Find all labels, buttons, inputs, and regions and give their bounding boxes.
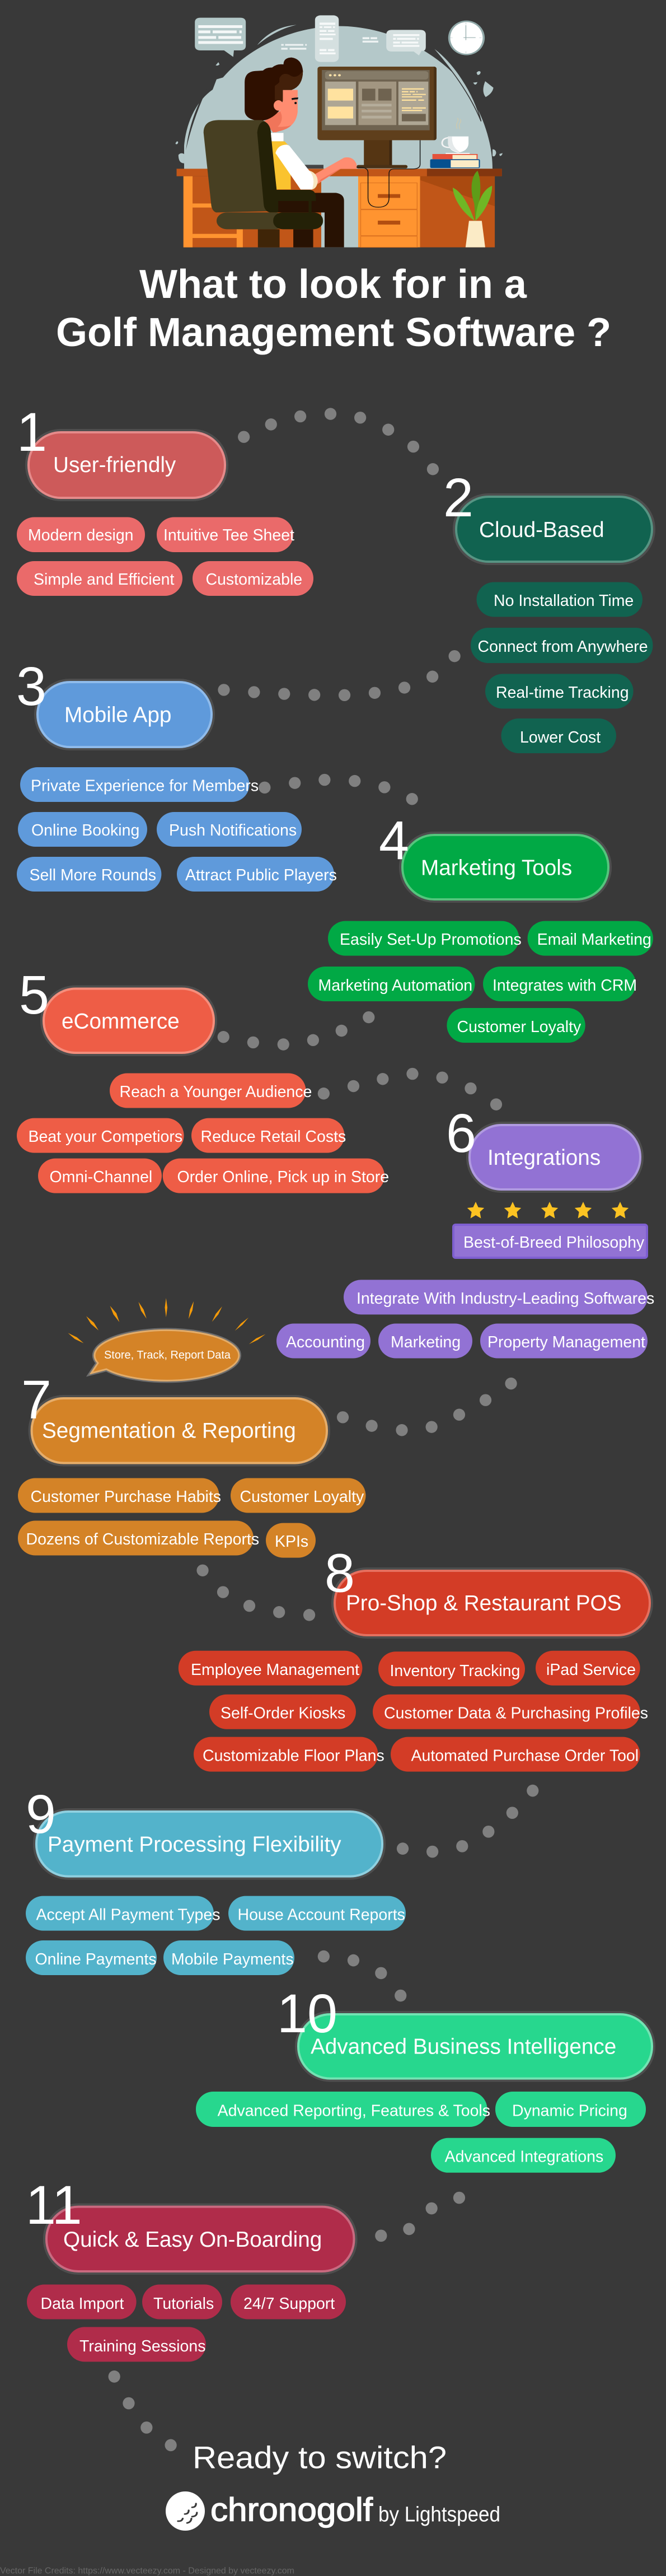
monitor cable [357,140,420,207]
dotted connector: 8 to 9 [397,1785,538,1858]
pill: Real-time Tracking [485,674,634,708]
heading pill: Pro-Shop & Restaurant POS [331,1567,653,1639]
pill: Customer Data & Purchasing Profiles [373,1695,648,1729]
section 9: Payment Processing Flexibility [26,1784,406,1975]
pill: Lower Cost: Lower Cost [520,729,601,746]
pill: Order Online, Pick up in Store: Order Online, Pick up in Store [177,1168,389,1186]
pill: Attract Public Players [177,857,337,892]
pill: Inventory Tracking: Inventory Tracking [390,1662,520,1680]
pill: Connect from Anywhere [471,628,653,663]
pill: 24/7 Support [231,2285,346,2320]
potted plant [453,171,492,248]
five gold stars [467,1202,629,1219]
clock [448,21,485,55]
section 6: Integrations [276,1103,654,1359]
pill: iPad Service: iPad Service [546,1661,636,1679]
speech bubble tall [315,15,339,62]
pill: Self-Order Kiosks: Self-Order Kiosks [221,1705,345,1723]
pill: Customer Loyalty: Customer Loyalty [240,1488,364,1506]
wordmark: by Lightspeed: by Lightspeed [378,2503,500,2527]
pill: 24/7 Support: 24/7 Support [243,2295,335,2313]
pill: Employee Management [179,1651,362,1686]
wordmark: chronogolf: chronogolf [210,2492,373,2528]
pill: Accounting: Accounting [286,1333,365,1351]
pill: Accept All Payment Types [26,1896,220,1931]
pill: Customizable [193,561,313,596]
number 7: 7 [21,1369,51,1430]
pill: Online Payments [26,1940,157,1975]
heading pill: Cloud-Based: Cloud-Based [479,518,604,542]
pill: Customer Loyalty [447,1008,585,1043]
pill: Marketing Automation [308,967,475,1001]
heading pill: Integrations: Integrations [487,1146,601,1170]
heading pill: Payment Processing Flexibility: Payment Processing Flexibility [48,1832,341,1857]
pill: Omni-Channel: Omni-Channel [49,1168,152,1186]
pill: Data Import: Data Import [40,2295,124,2313]
section 4: Marketing Tools [308,810,653,1043]
office chair [204,120,323,229]
desk [177,169,502,248]
computer monitor [317,67,437,169]
pill: Attract Public Players: Attract Public Players [185,866,337,884]
heading pill: eCommerce: eCommerce [62,1009,180,1033]
heading pill: Mobile App: Mobile App [64,703,171,727]
heading pill: Marketing Tools [399,832,612,903]
pill: Automated Purchase Order Tool: Automated Purchase Order Tool [411,1747,639,1765]
heading pill: User-friendly [25,429,228,501]
call to action: Ready to switch?: Ready to switch? [193,2439,447,2475]
heading pill: Segmentation & Reporting: Segmentation & Reporting [42,1419,296,1443]
dotted connector: 5 to 6 [318,1068,502,1110]
pill: Customizable: Customizable [206,571,302,589]
pill: Intuitive Tee Sheet: Intuitive Tee Sheet [163,526,294,544]
under-desk wall [321,176,358,248]
number 5: 5 [19,964,49,1025]
pill: Dynamic Pricing: Dynamic Pricing [512,2102,627,2120]
pill: Online Payments: Online Payments [35,1950,157,1968]
heading pill: Integrations [466,1122,644,1193]
number 10: 10 [277,1983,337,2044]
pill: Sell More Rounds [17,857,161,892]
section 10: Advanced Business Intelligence [196,1983,655,2173]
pill: Customer Loyalty [231,1478,366,1513]
pill: Advanced Reporting, Features & Tools: Advanced Reporting, Features & Tools [218,2102,490,2120]
pill: Reach a Younger Audience [110,1073,312,1108]
pill: Mobile Payments: Mobile Payments [171,1950,294,1968]
rays around speech bubble [68,1298,265,1344]
pill: Dozens of Customizable Reports [18,1521,259,1556]
heading pill: Mobile App [34,679,215,750]
heading pill: Advanced Business Intelligence: Advanced Business Intelligence [311,2035,616,2059]
pill: Push Notifications: Push Notifications [169,822,297,839]
heading pill: eCommerce [40,986,217,1056]
number 8: 8 [325,1543,355,1604]
section 3: Mobile App [16,656,337,892]
pill: Accept All Payment Types: Accept All Payment Types [36,1906,220,1924]
speech bubble: Store, Track, Report Data: Store, Track, Report Data [104,1349,231,1361]
section 1: User-friendly [17,402,313,596]
logo: chronogolf by Lightspeed [166,2491,500,2531]
heading pill: Quick & Easy On-Boarding: Quick & Easy On-Boarding [63,2228,322,2252]
pill: KPIs: KPIs [275,1533,308,1551]
pill: Property Management: Property Management [487,1333,645,1351]
pill: Simple and Efficient: Simple and Efficient [34,571,174,589]
pill: Beat your Competiors: Beat your Competiors [28,1128,182,1146]
pill: Data Import [27,2285,137,2320]
pill: Online Booking [18,812,147,847]
pill: Modern design: Modern design [28,526,134,544]
pill: Lower Cost [501,718,616,753]
section 8: Pro-Shop & Restaurant POS [179,1543,653,1772]
number 1: 1 [17,402,47,463]
heading pill: Cloud-Based [453,493,655,565]
coffee cup and books [430,118,480,168]
pill: Customer Purchase Habits [18,1478,221,1513]
dotted connector: 7 to 8 [196,1565,315,1621]
pill: Order Online, Pick up in Store [163,1159,389,1193]
number 9: 9 [26,1784,56,1845]
pill: Customer Loyalty: Customer Loyalty [457,1018,581,1036]
pill: No Installation Time: No Installation Time [494,592,634,610]
pill: Private Experience for Members [20,767,259,802]
heading pill: Payment Processing Flexibility [33,1808,386,1880]
dotted connector: 9 to 10 [318,1950,406,2001]
pill: Integrate With Industry-Leading Softwares [344,1280,654,1314]
pill: Customer Purchase Habits: Customer Purchase Habits [30,1488,221,1506]
pill: Push Notifications [157,812,302,847]
pill: Integrates with CRM [483,967,637,1001]
pill: No Installation Time [477,582,642,617]
dotted connector: 3 to 4 [259,774,418,805]
pill: Intuitive Tee Sheet [157,517,294,552]
speech bubble: Store, Track, Report Data [91,1330,239,1380]
speech bubble left [195,18,246,57]
pill: Omni-Channel [38,1159,162,1193]
section 2: Cloud-Based [443,467,655,753]
pill: Mobile Payments [163,1940,294,1975]
pill: Reduce Retail Costs [191,1118,346,1153]
pill: Training Sessions [67,2327,206,2362]
pill: Inventory Tracking [378,1651,525,1686]
title: Golf Management Software ? [56,310,611,355]
number 11: 11 [26,2174,82,2236]
pill: Modern design [17,517,145,552]
pill: Reduce Retail Costs: Reduce Retail Costs [200,1128,346,1146]
number 4: 4 [379,810,409,871]
section 7: Segmentation & Reporting [18,1369,366,1558]
pill: Marketing [378,1324,472,1359]
pill: Email Marketing [528,921,653,956]
pill: Integrates with CRM: Integrates with CRM [493,977,637,995]
keyboard [303,165,323,169]
person [245,58,357,248]
pill: Real-time Tracking: Real-time Tracking [496,684,629,702]
heading pill: Pro-Shop & Restaurant POS: Pro-Shop & Restaurant POS [346,1592,621,1616]
pill: Dozens of Customizable Reports: Dozens of Customizable Reports [26,1530,259,1548]
pill: Integrate With Industry-Leading Softwares: Integrate With Industry-Leading Softwares [357,1290,654,1308]
box: Best-of-Breed Philosophy [453,1225,647,1258]
dotted connector: 11 to call to action [109,2370,177,2451]
pill: Advanced Integrations: Advanced Integrations [445,2148,603,2166]
pill: Property Management [480,1324,648,1359]
pill: Dynamic Pricing [495,2092,646,2127]
pill: Training Sessions: Training Sessions [79,2337,205,2355]
dotted connector: 2 to 3 [218,650,461,701]
pill: Marketing Automation: Marketing Automation [318,977,472,995]
section 11: Quick & Easy On-Boarding [26,2174,357,2362]
title: What to look for in a [139,262,527,307]
heading pill: Marketing Tools: Marketing Tools [421,856,572,880]
pill: Sell More Rounds: Sell More Rounds [29,866,156,884]
speech bubble right [386,30,426,55]
pill: Customer Data & Purchasing Profiles: Customer Data & Purchasing Profiles [384,1705,648,1723]
pill: Connect from Anywhere: Connect from Anywhere [478,638,648,656]
dotted connector: 6 to 7 [337,1378,517,1436]
pill: Beat your Competiors [17,1118,184,1153]
pill: Private Experience for Members: Private Experience for Members [31,777,259,795]
pill: Employee Management: Employee Management [191,1661,359,1679]
heading pill: User-friendly: User-friendly [53,453,176,477]
number 2: 2 [443,467,473,528]
pill: Customizable Floor Plans [194,1737,384,1772]
pill: Simple and Efficient [17,561,182,596]
box: Best-of-Breed Philosophy: Best-of-Breed Philosophy [463,1234,645,1252]
dotted connector: 1 to 2 [238,408,439,475]
pill: KPIs [266,1523,316,1558]
pill: Marketing: Marketing [391,1333,461,1351]
pill: Advanced Reporting, Features & Tools [196,2092,490,2127]
pill: House Account Reports: House Account Reports [237,1906,405,1924]
pill: Easily Set-Up Promotions: Easily Set-Up Promotions [340,931,522,949]
pill: Email Marketing: Email Marketing [537,931,651,949]
icon: golf ball [166,2491,205,2531]
pill: Tutorials [142,2285,222,2320]
heading pill: Segmentation & Reporting [29,1395,330,1466]
pill: Customizable Floor Plans: Customizable Floor Plans [203,1747,384,1765]
pill: Reach a Younger Audience: Reach a Younger Audience [120,1083,312,1101]
pill: Automated Purchase Order Tool [391,1737,640,1772]
illustration: man working at a desk with a computer [175,15,503,248]
number 3: 3 [16,656,46,717]
pill: Online Booking: Online Booking [31,822,139,839]
dome background [184,26,493,169]
heading pill: Quick & Easy On-Boarding [43,2204,357,2275]
pill: iPad Service [536,1651,640,1686]
pill: Accounting [276,1324,370,1359]
pill: Advanced Integrations [431,2138,616,2173]
footer credit: Vector File Credits: https://www.vecteezy.com - Designed by vecteezy.com [0,2566,294,2576]
section 5: eCommerce [17,964,389,1193]
pill: Easily Set-Up Promotions [328,921,522,956]
dotted connector: 4 to 5 [218,1011,374,1051]
heading pill: Advanced Business Intelligence [295,2011,655,2082]
pill: Self-Order Kiosks [209,1695,356,1729]
title [56,262,611,355]
dotted connector: 10 to 11 [375,2192,465,2242]
number 6: 6 [446,1103,476,1164]
pill: Tutorials: Tutorials [153,2295,214,2313]
pill: House Account Reports [228,1896,406,1931]
